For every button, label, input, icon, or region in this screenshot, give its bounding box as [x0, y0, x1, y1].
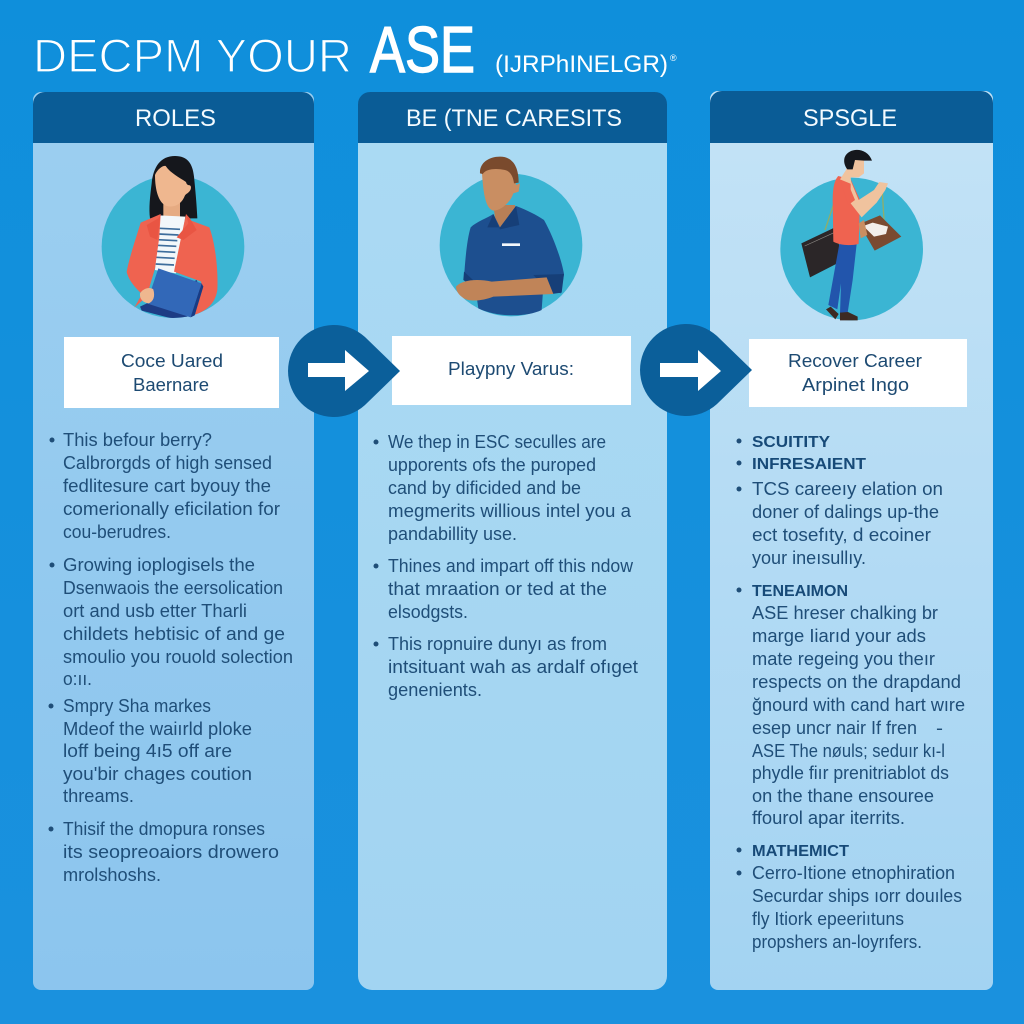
bullet text 2	[374, 556, 634, 622]
bullet text 1: Calbrorgds of high sensed	[63, 453, 272, 473]
bullet text 3: intsituant wah as ardalf ofıget	[388, 657, 638, 677]
text: box 3 caption: Arpinet Ingo	[802, 374, 909, 395]
bullet text 2: o:ıı.	[63, 669, 92, 689]
panel body: roles	[33, 92, 314, 990]
text box: panel 1 label	[64, 337, 279, 408]
bullet text 2: ASE The nøuls; seduır kı-l	[752, 741, 945, 761]
bullet text 3: genenients.	[388, 680, 482, 700]
bullet text 3: threams.	[63, 786, 134, 806]
text: box 2 caption: Playpny Varus:	[448, 358, 574, 379]
bullet text 2: Thines and impart off this ndow	[388, 556, 634, 576]
bullet text 1: cand by dificided and be	[388, 478, 581, 498]
bullet text 4	[48, 819, 279, 885]
text box: panel 3 label	[749, 339, 967, 407]
subheading: mathemict: MATHEMICT	[752, 843, 849, 860]
bullet text 2	[752, 603, 965, 828]
heading: roles: ROLES	[135, 105, 216, 132]
bullet text 3: fly Itiork epeeriıtuns	[752, 909, 904, 929]
text box: panel 2 label	[392, 336, 631, 405]
panel: be one careers	[358, 92, 667, 990]
bullet text 2: smoulio you rouold solection	[63, 647, 293, 667]
bullet text 3: This ropnuire dunyı as from	[388, 634, 607, 654]
title: ®	[670, 53, 677, 63]
subheading: infresaient: INFRESAIENT	[752, 456, 866, 473]
title: (IJRPhINELGR)	[495, 51, 668, 78]
bullet text 2	[50, 555, 293, 689]
panel body: right	[710, 91, 993, 990]
panel body: middle	[358, 92, 667, 990]
text: box 3 caption: Recover Career	[788, 350, 922, 371]
bullet text 1: This befour berry?	[63, 430, 212, 450]
panel: spsgle	[710, 91, 993, 990]
subheading: scuitity: SCUITITY	[752, 434, 830, 451]
bullet text 3: loff being 4ı5 off are	[63, 741, 232, 761]
bullet text 1: cou-berudres.	[63, 522, 171, 542]
bullet text 1: ect tosefıty, d ecoiner	[752, 525, 931, 545]
bullet text 3: Securdar ships ıorr douıles	[752, 886, 962, 906]
title: ASE	[370, 13, 475, 86]
bullet text 2: Dsenwaois the eersolication	[63, 578, 283, 598]
bullet text 3: you'bir chages coution	[63, 764, 252, 784]
bullet text 2: Growing ioplogisels the	[63, 555, 255, 575]
bullet text 3	[736, 863, 962, 952]
bullet text 2: esep uncr nair If fren	[752, 718, 917, 738]
text: box 1 caption	[121, 350, 223, 395]
text: box 3 caption	[788, 350, 922, 395]
panel header: right	[710, 91, 993, 143]
bullet text 3: Mdeof the waiırld ploke	[63, 719, 252, 739]
bullet text 1: We thep in ESC seculles are	[388, 432, 606, 452]
icon: woman with folder	[102, 156, 244, 318]
bullet text 2: that mraation or ted at the	[388, 579, 607, 599]
bullet text 2: ASE hreser chalking br	[752, 603, 938, 623]
bullet text 4: its seopreoaiors drowero	[63, 842, 279, 862]
bullet text 1: doner of dalings up-the	[752, 502, 939, 522]
bullet text 2: ort and usb etter Tharli	[63, 601, 247, 621]
bullet text 2: respects on the drapdand	[752, 672, 961, 692]
heading: right: SPSGLE	[803, 105, 897, 132]
panel: roles	[33, 92, 314, 990]
bullet text 1: comerionally eficilation for	[63, 499, 280, 519]
bullet text 2: elsodgsts.	[388, 602, 468, 622]
bullet text 2: marge Iiarıd your ads	[752, 626, 926, 646]
bullet text 1: megmerits willious intel you a	[388, 501, 632, 521]
bullet text 3	[48, 696, 252, 806]
bullet text 2: -	[936, 718, 943, 738]
bullet text 1: upporents ofs the puroped	[388, 455, 596, 475]
arrow: middle to right	[640, 324, 752, 416]
bullet text 1	[374, 432, 632, 544]
bullet text 1: TCS careeıy elation on	[752, 479, 943, 499]
bullet text 2: childets hebtisic of and ge	[63, 624, 285, 644]
bullet text 2: mate regeing you theır	[752, 649, 935, 669]
text: box 1 caption: Coce Uared	[121, 350, 223, 371]
icon: man in blue shirt	[440, 157, 582, 316]
bullet text 1: pandabillity use.	[388, 524, 517, 544]
bullet text 2: ffourol apar iterrits.	[752, 808, 905, 828]
bullet text 2: ğnourd with cand hart wıre	[752, 695, 965, 715]
bullet text 2: on the thane ensouree	[752, 786, 934, 806]
bullet text 3: Smpry Sha markes	[63, 696, 211, 716]
bullet text 3	[374, 634, 638, 700]
panel header: roles	[33, 92, 314, 143]
bullet text 2: phydle fiır prenitriablot ds	[752, 763, 949, 783]
bullet text 4: Thisif the dmopura ronses	[63, 819, 265, 839]
heading: middle: BE (TNE CARESITS	[406, 105, 622, 132]
arrow: roles to middle	[288, 325, 400, 417]
bullet text 1: your ineısullıy.	[752, 548, 866, 568]
title: DECPM YOUR	[33, 29, 352, 82]
text: box 1 caption: Baernare	[133, 374, 209, 395]
icon: man carrying bag and tablet	[780, 150, 923, 320]
title	[33, 13, 677, 86]
bullet text 1: fedlitesure cart byouy the	[63, 476, 271, 496]
subheading: teneaimon: TENEAIMON	[752, 583, 848, 600]
bullet text 1	[736, 479, 943, 568]
bullet text 3: propshers an-loyrıfers.	[752, 932, 922, 952]
bullet text 4: mrolshoshs.	[63, 865, 161, 885]
panel header: middle	[358, 92, 667, 143]
bullet text 3: Cerro-Itione etnophiration	[752, 863, 955, 883]
bullet text 1	[50, 430, 280, 542]
